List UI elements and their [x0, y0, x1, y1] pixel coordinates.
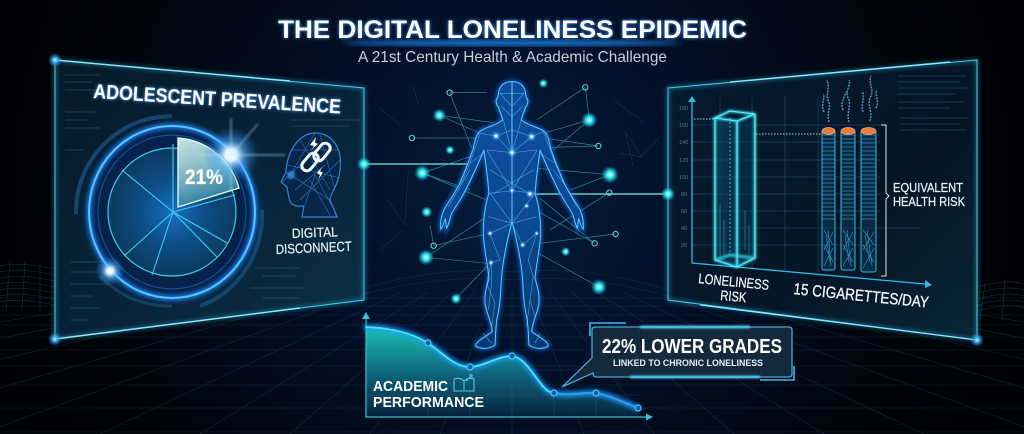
panel: health risk comparison: [668, 60, 984, 347]
label: academic performance: ACADEMIC: [373, 378, 448, 395]
panel frame: [668, 60, 984, 347]
chain: [300, 141, 332, 173]
cigarette 3: [861, 128, 876, 272]
label: equivalent health risk: [893, 180, 965, 209]
axis labels: 180: [679, 106, 688, 112]
chart grid: [366, 345, 640, 417]
axis labels: 40: [681, 226, 687, 232]
cigarette 2: [841, 128, 855, 270]
title: THE DIGITAL LONELINESS EPIDEMIC: [278, 16, 747, 44]
pie slice: [178, 138, 239, 207]
pie chart: 21 percent: [67, 107, 285, 317]
callout: 22 percent lower grades: 22% LOWER GRADES: [602, 336, 782, 358]
label: digital disconnect: DISCONNECT: [275, 239, 352, 257]
label: equivalent health risk: EQUIVALENT: [893, 180, 963, 195]
connector: left panel to body: [357, 157, 470, 171]
bar: loneliness risk: [715, 111, 755, 267]
label: academic performance: [373, 378, 484, 411]
body mesh: [448, 90, 577, 343]
axis labels: 120: [679, 158, 688, 164]
label: loneliness risk: RISK: [720, 287, 748, 305]
data points: [425, 340, 641, 411]
axes: [362, 312, 653, 420]
label: digital disconnect: [275, 224, 352, 257]
bar chart grid and axes: [688, 96, 932, 288]
network nodes: [409, 79, 619, 304]
smoke: [823, 76, 877, 122]
bracket: [881, 125, 889, 276]
callout: 22 percent lower grades: [562, 323, 794, 387]
label: equivalent health risk: HEALTH RISK: [893, 194, 965, 209]
network lines: [412, 87, 616, 299]
axis labels: 20: [681, 243, 687, 249]
bolts: [310, 137, 323, 180]
cigarettes: [822, 76, 877, 272]
callout: 22 percent lower grades: LINKED TO CHRONIC LONELINESS: [613, 358, 763, 368]
connector: body to right panel: [530, 187, 675, 201]
value: 21 percent: 21%: [185, 166, 223, 189]
label: academic performance: PERFORMANCE: [373, 394, 484, 411]
body outline: [441, 82, 583, 348]
flare: [198, 118, 285, 192]
axis labels: 60: [681, 209, 687, 215]
human body figure: [441, 82, 583, 348]
cigarette 1: [822, 128, 835, 270]
chart: academic performance: [362, 312, 653, 420]
trend line: [366, 327, 638, 408]
area fill: [366, 327, 638, 417]
axis labels: 80: [681, 192, 687, 198]
network lines and nodes: [380, 79, 660, 304]
label: loneliness risk: LONELINESS: [698, 270, 770, 293]
axis labels: 140: [679, 140, 688, 146]
axis labels: 100: [679, 175, 688, 181]
body nodes: [486, 131, 540, 266]
panel frame: [48, 53, 364, 346]
panel: adolescent prevalence: [48, 53, 364, 346]
icon: head with broken chain: [281, 133, 341, 217]
floor grid: [0, 262, 1024, 434]
axis labels: [679, 106, 688, 249]
small flare: [95, 256, 125, 286]
subtitle: A 21st Century Health & Academic Challenge: [358, 49, 667, 66]
label: loneliness risk: [698, 270, 770, 305]
label: 15 cigarettes per day: 15 CIGARETTES/DAY: [793, 281, 930, 312]
label: digital disconnect: DIGITAL: [292, 224, 339, 241]
axis labels: 160: [679, 123, 688, 129]
heading: adolescent prevalence: ADOLESCENT PREVALENCE: [93, 80, 342, 119]
icon: book with arrow: [454, 375, 474, 391]
body glow: [441, 82, 583, 348]
